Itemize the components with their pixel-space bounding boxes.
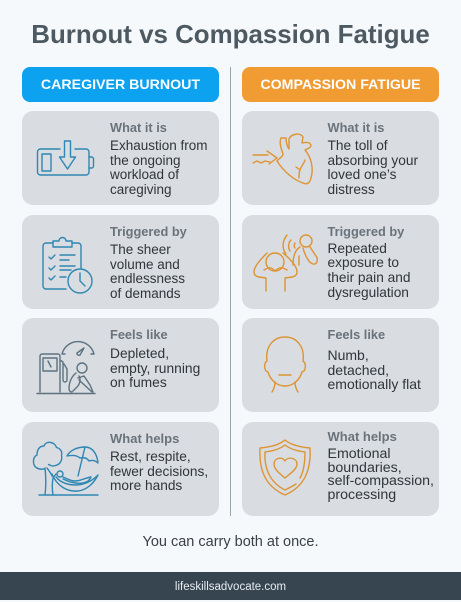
text: feels like	[328, 327, 421, 392]
text: what it is: Exhaustion from	[110, 138, 208, 153]
title: Burnout vs Compassion Fatigue	[31, 21, 430, 49]
text: what helps: What helps	[110, 431, 179, 446]
text: feels like: on fumes	[110, 375, 167, 390]
text: triggered by: their pain and	[328, 270, 410, 285]
panel: compassion feels like	[242, 318, 439, 412]
text: feels like: emotionally flat	[328, 376, 421, 392]
closing note: You can carry both at once.	[142, 534, 318, 550]
text: what helps: Rest, respite,	[110, 449, 191, 464]
text: what helps: What helps	[328, 429, 397, 444]
panel: compassion what helps	[242, 422, 439, 516]
text: what it is: workload of	[110, 167, 179, 182]
text: what it is: caregiving	[110, 182, 172, 197]
text: what it is: absorbing your	[328, 153, 418, 168]
text: what it is	[110, 120, 208, 197]
text: triggered by	[110, 224, 187, 301]
text: feels like: Depleted,	[110, 346, 169, 361]
text: feels like: Feels like	[328, 327, 385, 342]
panel: burnout feels like	[22, 318, 219, 412]
text: what it is: The toll of	[328, 138, 388, 153]
text: what it is: What it is	[328, 120, 384, 135]
panel: burnout triggered by	[22, 215, 219, 309]
text: triggered by: volume and	[110, 257, 180, 272]
text: triggered by: of demands	[110, 286, 181, 301]
text: what it is	[328, 120, 418, 197]
text: what helps	[110, 431, 208, 493]
text: what helps: fewer decisions,	[110, 464, 208, 479]
footer bar: lifeskillsadvocate.com	[175, 581, 286, 593]
header: caregiver burnout	[22, 67, 219, 102]
text: what helps: more hands	[110, 478, 182, 493]
text: what it is: the ongoing	[110, 153, 181, 168]
text: feels like: Numb,	[328, 347, 369, 363]
panel: compassion triggered by	[242, 215, 439, 309]
text: what it is: What it is	[110, 120, 167, 135]
text: what helps: self-compassion,	[328, 473, 434, 489]
text: triggered by: exposure to	[328, 255, 399, 270]
panel: burnout what helps	[22, 422, 219, 516]
panel: compassion what it is	[242, 111, 439, 205]
text: triggered by: Repeated	[328, 240, 387, 256]
text: what it is: loved one’s	[328, 167, 396, 182]
text: triggered by: endlessness	[110, 271, 185, 286]
text: what helps	[328, 429, 434, 502]
text: triggered by: The sheer	[110, 242, 171, 257]
header: compassion fatigue	[242, 67, 439, 102]
text: feels like: Feels like	[110, 327, 168, 342]
text: feels like: empty, running	[110, 361, 200, 376]
text: what helps: processing	[328, 486, 396, 502]
panel: burnout what it is	[22, 111, 219, 205]
text: what helps: Emotional	[328, 446, 391, 462]
text: triggered by	[328, 224, 410, 300]
header: compassion fatigue: COMPASSION FATIGUE	[260, 77, 421, 93]
text: feels like: detached,	[328, 362, 389, 378]
header: caregiver burnout: CAREGIVER BURNOUT	[41, 77, 200, 93]
text: what helps: boundaries,	[328, 460, 402, 476]
text: feels like	[110, 327, 200, 390]
text: triggered by: Triggered by	[110, 224, 187, 239]
text: triggered by: dysregulation	[328, 285, 409, 300]
text: what it is: distress	[328, 182, 375, 197]
text: triggered by: Triggered by	[328, 224, 404, 239]
footer bar	[0, 572, 461, 600]
